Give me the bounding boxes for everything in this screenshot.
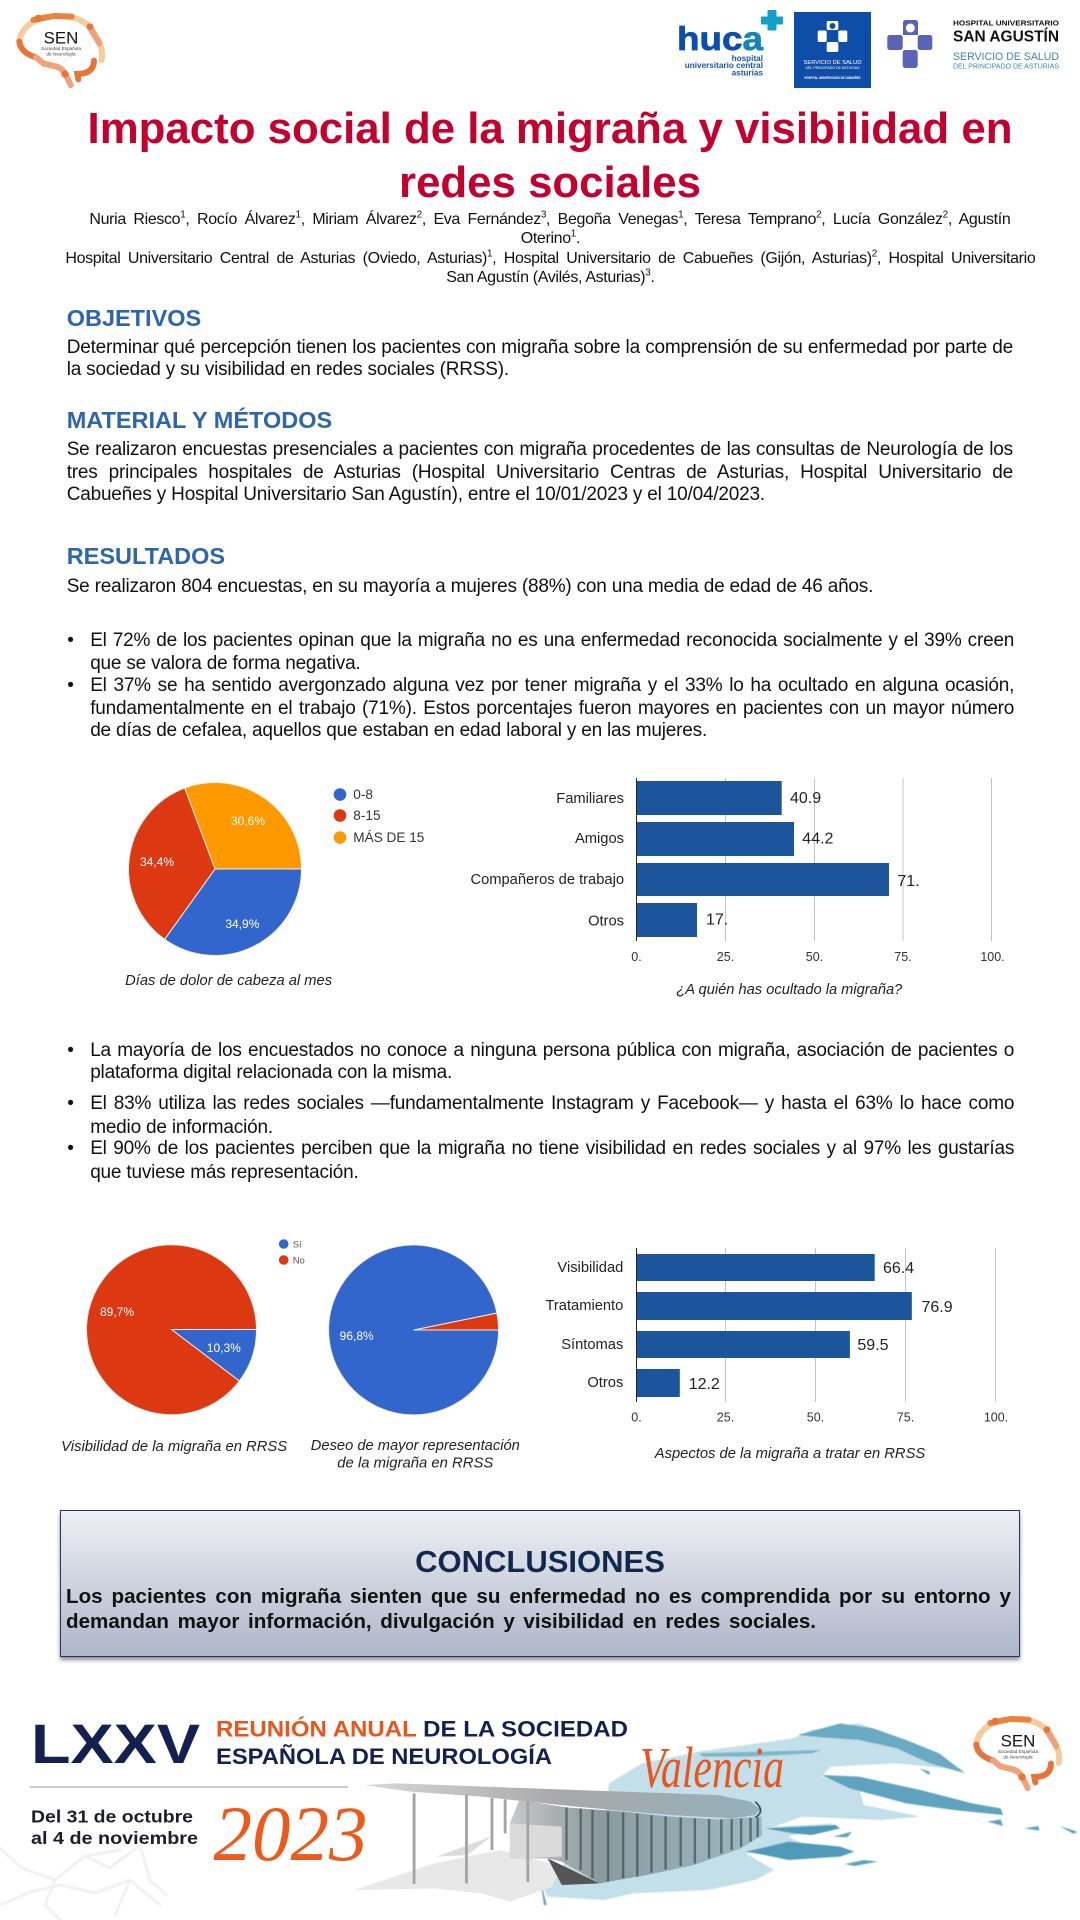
bar chart: aspectos de la migraña a tratar en RRSS: 50. (807, 1411, 824, 1425)
legend: días de dolor: 8-15 (353, 808, 381, 823)
event subtitle: REUNIÓN ANUAL DE LA SOCIEDAD (216, 1717, 628, 1742)
logo: SEN bottom right: de Neurología (1003, 1754, 1033, 1759)
logo: SEN bottom right: SEN (1001, 1731, 1035, 1750)
bar chart: aspectos de la migraña a tratar en RRSS: 75. (897, 1411, 914, 1425)
event year: 2023 (214, 1790, 368, 1877)
legend: sí / no: No (293, 1256, 305, 1266)
logo: Servicio de Salud Hospital de Cabueñes: SERVICIO DE SALUD (804, 60, 862, 66)
logo: SEN top left (16, 12, 105, 88)
legend: días de dolor (334, 787, 424, 845)
logo: Hospital Universitario San Agustín: SERVICIO DE SALUD (953, 51, 1059, 63)
pie chart: deseo de mayor representación: Deseo de mayor representación (311, 1438, 520, 1454)
bullet list: redes sociales (67, 1040, 1014, 1183)
bar chart: a quién has ocultado la migraña: 25. (717, 950, 734, 964)
logo: Hospital Universitario San Agustín: SAN AGUSTÍN (953, 29, 1059, 46)
heading: objetivos: OBJETIVOS (67, 305, 201, 331)
bar chart: a quién has ocultado la migraña: Amigos (575, 831, 624, 847)
bar chart: a quién has ocultado la migraña: ¿A quién has ocultado la migraña? (676, 982, 903, 998)
bar chart: a quién has ocultado la migraña: 100. (980, 950, 1005, 964)
bar chart: a quién has ocultado la migraña: 40.9 (790, 790, 821, 807)
text: material y métodos: tres principales hospitales de Asturias (Hospital Universitario Centras de Asturias, Hospital Universitario de (67, 462, 1013, 483)
bullet list: reconocimiento social: El 72% de los pacientes opinan que la migraña no es una enfermedad reconocida socialmente y el 39% creen (90, 630, 1014, 651)
bar chart: aspectos de la migraña a tratar en RRSS: Tratamiento (545, 1298, 623, 1314)
legend: días de dolor: MÁS DE 15 (353, 830, 424, 845)
event city: Valencia (640, 1735, 784, 1800)
text: material y métodos: Se realizaron encuestas presenciales a pacientes con migraña procedentes de las consultas de Neurología de los (67, 439, 1013, 460)
bullet list: reconocimiento social: de días de cefalea, aquellos que estaban en edad laboral y en las mujeres. (90, 720, 707, 741)
authors and affiliations: Hospital Universitario Central de Asturias (Oviedo, Asturias)1, Hospital Universitario de Cabueñes (Gijón, Asturias)2, Hospital Universitario (65, 248, 1035, 266)
bar chart: a quién has ocultado la migraña: 71. (897, 873, 920, 890)
text: • (67, 675, 74, 696)
text: • (67, 1138, 74, 1159)
pie chart: visibilidad de la migraña en RRSS: Visibilidad de la migraña en RRSS (61, 1439, 288, 1455)
logo: huca: hospital (732, 54, 763, 63)
bar chart: aspectos de la migraña a tratar en RRSS: 100. (984, 1411, 1008, 1425)
pie chart: días de dolor de cabeza al mes: 34,9% (225, 917, 260, 931)
logo: Servicio de Salud Hospital de Cabueñes: DEL PRINCIPADO DE ASTURIAS (806, 66, 860, 70)
authors and affiliations: San Agustín (Avilés, Asturias)3. (446, 268, 655, 286)
text: • (67, 1040, 74, 1061)
text: objetivos: Determinar qué percepción tienen los pacientes con migraña sobre la comprensión de su enfermedad por parte de (67, 337, 1013, 358)
logo: SEN top left: Sociedad Española (41, 46, 81, 51)
pie chart: días de dolor de cabeza al mes: 30,6% (231, 814, 265, 828)
event subtitle: ESPAÑOLA DE NEUROLOGÍA (216, 1744, 552, 1769)
logo: SEN top left: SEN (44, 28, 78, 47)
bullet list: reconocimiento social: El 37% se ha sentido avergonzado alguna vez por tener migraña y el 33% lo ha ocultado en alguna ocasión, (90, 675, 1014, 696)
bullet list: reconocimiento social: fundamentalmente en el trabajo (71%). Estos porcentajes fueron mayores en pacientes con un mayor número (90, 698, 1014, 718)
bar chart: a quién has ocultado la migraña: 0. (631, 950, 642, 964)
bullet list: redes sociales: que tuviese más representación. (90, 1162, 359, 1183)
pie chart: visibilidad de la migraña en RRSS: 89,7% (100, 1305, 134, 1319)
bullet list: redes sociales: La mayoría de los encuestados no conoce a ninguna persona pública con migraña, asociación de pacientes o (90, 1040, 1014, 1061)
text: resultados intro: Se realizaron 804 encuestas, en su mayoría a mujeres (88%) con una media de edad de 46 años. (67, 576, 873, 596)
bar chart: a quién has ocultado la migraña: 44.2 (802, 830, 834, 848)
bar chart: aspectos de la migraña a tratar en RRSS: 76.9 (922, 1299, 953, 1316)
bullet list: redes sociales: plataforma digital relacionada con la misma. (90, 1062, 452, 1083)
event dates: Del 31 de octubre (31, 1807, 193, 1827)
bar chart: aspectos de la migraña a tratar en RRSS: Aspectos de la migraña a tratar en RRSS (654, 1446, 926, 1462)
pie chart: visibilidad de la migraña en RRSS: 10,3% (207, 1341, 241, 1355)
pie chart: deseo de mayor representación: 96,8% (340, 1329, 374, 1343)
bullet list: redes sociales: El 90% de los pacientes perciben que la migraña no tiene visibilidad en redes sociales y al 97% les gustarías (90, 1138, 1014, 1159)
logo: huca: asturias (732, 68, 763, 78)
bullet list: redes sociales: medio de información. (90, 1117, 273, 1138)
bar chart: aspectos de la migraña a tratar en RRSS: 66.4 (883, 1260, 914, 1277)
text: • (67, 1093, 74, 1114)
title: redes sociales (399, 158, 701, 207)
text: • (67, 630, 74, 651)
bar chart: aspectos de la migraña a tratar en RRSS: 59.5 (857, 1337, 889, 1354)
text: conclusiones (66, 1585, 1011, 1633)
bar chart: aspectos de la migraña a tratar en RRSS: 25. (717, 1411, 734, 1425)
bullet list: redes sociales: El 83% utiliza las redes sociales —fundamentalmente Instagram y Facebook— y hasta el 63% lo hace como (90, 1093, 1014, 1114)
logo: Hospital Universitario San Agustín (887, 18, 1059, 71)
text: objetivos (67, 337, 1013, 380)
bar chart: a quién has ocultado la migraña: 50. (806, 950, 823, 964)
logo: SEN bottom right (973, 1716, 1062, 1791)
authors and affiliations (65, 209, 1036, 286)
pie chart: deseo de mayor representación: de la migraña en RRSS (337, 1456, 494, 1472)
bar chart: a quién has ocultado la migraña: Familiares (556, 791, 624, 807)
title: Impacto social de la migraña y visibilidad en (88, 104, 1012, 153)
pie chart: días de dolor de cabeza al mes: 34,4% (140, 855, 174, 869)
logo: huca (677, 10, 783, 78)
bar chart: a quién has ocultado la migraña: Compañeros de trabajo (470, 872, 624, 888)
text: objetivos: la sociedad y su visibilidad en redes sociales (RRSS). (67, 359, 509, 380)
legend: sí / no: Sí (293, 1240, 302, 1250)
bar chart: aspectos de la migraña a tratar en RRSS: Otros (587, 1375, 623, 1391)
bullet list: reconocimiento social: que se valora de forma negativa. (90, 652, 361, 674)
text: material y métodos (67, 439, 1013, 505)
bar chart: a quién has ocultado la migraña: 17. (706, 912, 728, 928)
logo: SEN bottom right: Sociedad Española (998, 1749, 1038, 1754)
panel: conclusiones (60, 1510, 1020, 1657)
logo: huca: huca (677, 20, 764, 57)
text: conclusiones: Los pacientes con migraña sienten que su enfermedad no es comprendida por su entorno y (66, 1585, 1011, 1608)
event dates: al 4 de noviembre (31, 1828, 198, 1848)
logo: Hospital Universitario San Agustín: HOSPITAL UNIVERSITARIO (953, 18, 1059, 27)
bar chart: a quién has ocultado la migraña: Otros (588, 914, 624, 930)
authors and affiliations: Nuria Riesco1, Rocío Álvarez1, Miriam Álvarez2, Eva Fernández3, Begoña Venegas1, Teresa Temprano2, Lucía González2, Agustín (89, 209, 1010, 228)
logo: SEN top left: de Neurología (46, 51, 76, 56)
bar chart: aspectos de la migraña a tratar en RRSS: 0. (631, 1411, 642, 1425)
heading: resultados: RESULTADOS (67, 543, 225, 569)
text: material y métodos: Cabueñes y Hospital Universitario San Agustín), entre el 10/01/2023 y el 10/04/2023. (67, 484, 765, 505)
bar chart: aspectos de la migraña a tratar en RRSS: 12.2 (689, 1376, 720, 1393)
logo: Hospital Universitario San Agustín: DEL PRINCIPADO DE ASTURIAS (953, 62, 1059, 71)
authors and affiliations: Oterino1. (521, 229, 580, 247)
logo: Servicio de Salud Hospital de Cabueñes: HOSPITAL UNIVERSITARIO DE CABUEÑES (804, 75, 861, 80)
heading: conclusiones: CONCLUSIONES (415, 1544, 665, 1579)
bar chart: a quién has ocultado la migraña: 75. (894, 950, 912, 964)
logo: Servicio de Salud Hospital de Cabueñes (794, 12, 871, 88)
text: conclusiones: demandan mayor información, divulgación y visibilidad en redes sociales. (66, 1610, 816, 1633)
bar chart: aspectos de la migraña a tratar en RRSS: Visibilidad (557, 1260, 623, 1276)
bar chart: aspectos de la migraña a tratar en RRSS: Síntomas (561, 1337, 623, 1353)
logo: huca: universitario central (685, 61, 763, 70)
event title: LXXV: LXXV (31, 1712, 200, 1775)
title (88, 104, 1012, 207)
heading: material y métodos: MATERIAL Y MÉTODOS (67, 407, 332, 433)
pie chart: días de dolor de cabeza al mes: Días de dolor de cabeza al mes (125, 973, 332, 989)
bullet list: reconocimiento social (67, 630, 1014, 741)
legend: días de dolor: 0-8 (353, 787, 373, 802)
